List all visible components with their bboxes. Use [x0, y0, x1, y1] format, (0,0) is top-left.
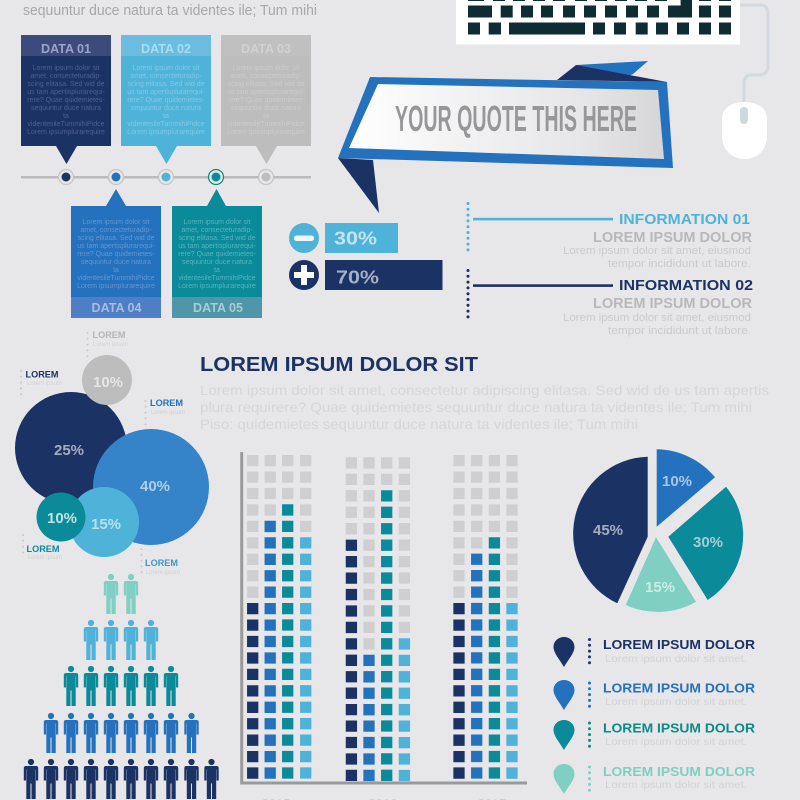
bubble label: navy: LOREM [26, 370, 59, 380]
bubble label: navy: Lorem ipsum [27, 381, 62, 387]
bubble chart: 25% [54, 442, 84, 459]
panel: data 03: DATA 03 [241, 42, 291, 56]
legend item: mint: Lorem ipsum dolor sit amet. [605, 779, 747, 791]
2015 columns [253, 455, 306, 779]
panel: data 02 [121, 35, 211, 164]
stat: plus 70%: 70% [336, 266, 379, 288]
panel: data 04: ta [113, 267, 119, 274]
timeline line with markers [21, 170, 311, 184]
panel: data 04: DATA 04 [92, 301, 142, 315]
bubble label: light blue [142, 549, 180, 576]
panel: data 02: Lorem ipsumplurarequire [127, 129, 205, 136]
information 02 [468, 270, 753, 337]
panel: data 01: ta [63, 113, 69, 120]
panel: data 05: videntesileTummihiPidce [178, 275, 256, 282]
panel: data 01: sequuntur duce natura [31, 105, 101, 112]
panel: data 02: ta [163, 113, 169, 120]
panel: data 03: us tam apertisplurarequi- [227, 89, 305, 96]
legend item: blue: LOREM IPSUM DOLOR [603, 680, 756, 696]
panel: data 01: Lorem ipsum dolor sit [33, 65, 100, 72]
panel: data 04: scing elitasa. Sed wid de [77, 235, 155, 242]
panel: data 03: amet, consecteturadip- [230, 73, 302, 80]
panel: data 05: amet, consecteturadip- [181, 227, 253, 234]
mouse with cable [722, 5, 768, 159]
information 02: tempor incididunt ut labore. [608, 325, 751, 337]
panel: data 03: Lorem ipsumplurarequire [227, 129, 305, 136]
panel: data 02: amet, consecteturadip- [130, 73, 202, 80]
chart axes [242, 452, 527, 783]
panel: data 04: sequuntur duce natura [81, 259, 151, 266]
panel: data 01: amet, consecteturadip- [30, 73, 102, 80]
information 02: INFORMATION 02 [619, 278, 753, 294]
panel: data 02: DATA 02 [141, 42, 191, 56]
panel: data 05: rere? Quae quidemietes- [178, 251, 256, 258]
panel: data 03: ta [263, 113, 269, 120]
panel: data 03: sequuntur duce natura [231, 105, 301, 112]
legend item: teal: LOREM IPSUM DOLOR [603, 720, 756, 736]
bubble label: light blue: LOREM [145, 558, 178, 569]
pie chart: 15% [645, 579, 675, 596]
panel: data 05: Lorem ipsum dolor sit [184, 219, 251, 226]
information 01: INFORMATION 01 [619, 212, 750, 228]
main body text: Lorem ipsum dolor sit amet, consectetur adipiscing elitasa. Sed wid de us tam apertis [200, 382, 769, 398]
bubble label: teal [23, 535, 62, 561]
panel: data 04: Lorem ipsumplurarequire [77, 283, 155, 290]
2016 columns [351, 457, 404, 781]
panel: data 03: scing elitasa. Sed wid de [227, 81, 305, 88]
stat: minus 30%: 30% [334, 228, 377, 248]
main body text: plura requirere? Quae quidemietes sequuntur duce natura ta videntes ile; Tum mihi [200, 399, 752, 415]
bubble label: grey [88, 330, 128, 357]
bubble chart: 15% [91, 516, 121, 533]
2017 columns [459, 455, 512, 779]
panel: data 01: videntesileTummihiPidce [27, 121, 105, 128]
stat: plus 70% [289, 260, 442, 290]
bubble label: light blue: Lorem ipsum [146, 570, 180, 576]
panel: data 03 [221, 35, 311, 164]
bubble label: teal: Lorem ipsum [28, 555, 62, 561]
information 01 [468, 204, 753, 270]
information 01: tempor incididunt ut labore. [608, 258, 751, 270]
panel: data 03: Lorem ipsum dolor sit [233, 65, 300, 72]
legend item: blue: Lorem ipsum dolor sit amet. [605, 696, 747, 708]
pie chart: 10% [662, 473, 692, 490]
legend item: mint: LOREM IPSUM DOLOR [603, 764, 756, 779]
panel: data 05: sequuntur duce natura [182, 259, 252, 266]
panel: data 05: us tam apertisplurarequi- [178, 243, 256, 250]
pie chart [573, 449, 743, 612]
intro text fragment: sequuntur duce natura ta videntes ile; Tum mihi [23, 3, 317, 19]
legend item: navy: LOREM IPSUM DOLOR [603, 637, 756, 652]
panel: data 04: rere? Quae quidemietes- [77, 251, 155, 258]
panel: data 04: videntesileTummihiPidce [77, 275, 155, 282]
bubble label: blue: Lorem ipsum [151, 410, 185, 416]
panel: data 05: Lorem ipsumplurarequire [178, 283, 256, 290]
panel: data 01: Lorem ipsumplurarequire [27, 129, 105, 136]
bubble label: grey: LOREM [92, 330, 126, 341]
panel: data 02: videntesileTummihiPidce [127, 121, 205, 128]
panel: data 03: rere? Quae quidemietes- [227, 97, 305, 104]
bubble chart [15, 355, 209, 557]
people pyramid [24, 574, 219, 799]
pie chart: 45% [593, 522, 623, 539]
bubble label: blue: LOREM [150, 398, 183, 409]
bubble label: navy [21, 370, 62, 397]
panel: data 04: us tam apertisplurarequi- [77, 243, 155, 250]
bubble chart: 40% [140, 478, 170, 495]
year labels [262, 796, 506, 800]
panel: data 04 [71, 189, 161, 318]
panel: data 05 [172, 189, 262, 318]
quote ribbon [338, 61, 673, 213]
main body text [200, 382, 769, 432]
main body text: Piso: quidemietes sequuntur duce natura ta videntes ile; Tum mihi [200, 416, 638, 432]
square-unit column chart [242, 452, 527, 800]
bubble label: teal: LOREM [26, 544, 60, 555]
information 01: LOREM IPSUM DOLOR [593, 230, 753, 246]
panel: data 04: Lorem ipsum dolor sit [83, 219, 150, 226]
legend item: navy: Lorem ipsum dolor sit amet. [605, 653, 747, 665]
bubble label: blue [146, 398, 185, 425]
information 02: Lorem ipsum dolor sit amet, eiusmod [563, 312, 751, 324]
panel: data 02: scing elitasa. Sed wid de [127, 81, 205, 88]
panel: data 01: DATA 01 [41, 42, 91, 56]
legend item: navy [554, 637, 756, 667]
panel: data 01: scing elitasa. Sed wid de [27, 81, 105, 88]
legend item: mint [554, 764, 756, 794]
panel: data 01: rere? Quae quidemietes- [27, 97, 105, 104]
panel: data 05: ta [214, 267, 220, 274]
bubble label: grey: Lorem ipsum [93, 342, 128, 348]
panel: data 05: DATA 05 [193, 301, 243, 315]
panel: data 02: us tam apertisplurarequi- [127, 89, 205, 96]
panel: data 02: rere? Quae quidemietes- [127, 97, 205, 104]
legend item: teal: Lorem ipsum dolor sit amet. [605, 736, 747, 748]
panel: data 04: amet, consecteturadip- [80, 227, 152, 234]
main heading: LOREM IPSUM DOLOR SIT [200, 354, 478, 376]
stat: minus 30% [289, 223, 398, 253]
bubble chart: 10% [47, 510, 77, 527]
panel: data 01 [21, 35, 111, 164]
panel: data 01: us tam apertisplurarequi- [27, 89, 105, 96]
information 02: LOREM IPSUM DOLOR [593, 296, 753, 312]
panel: data 03: videntesileTummihiPidce [227, 121, 305, 128]
legend item: blue [554, 680, 756, 710]
panel: data 05: scing elitasa. Sed wid de [178, 235, 256, 242]
bubble chart: 10% [93, 374, 123, 391]
panel: data 02: Lorem ipsum dolor sit [133, 65, 200, 72]
keyboard [456, 0, 740, 44]
information 01: Lorem ipsum dolor sit amet, eiusmod [563, 245, 751, 257]
panel: data 02: sequuntur duce natura [131, 105, 201, 112]
pie chart: 30% [693, 534, 723, 551]
legend item: teal [554, 720, 756, 750]
